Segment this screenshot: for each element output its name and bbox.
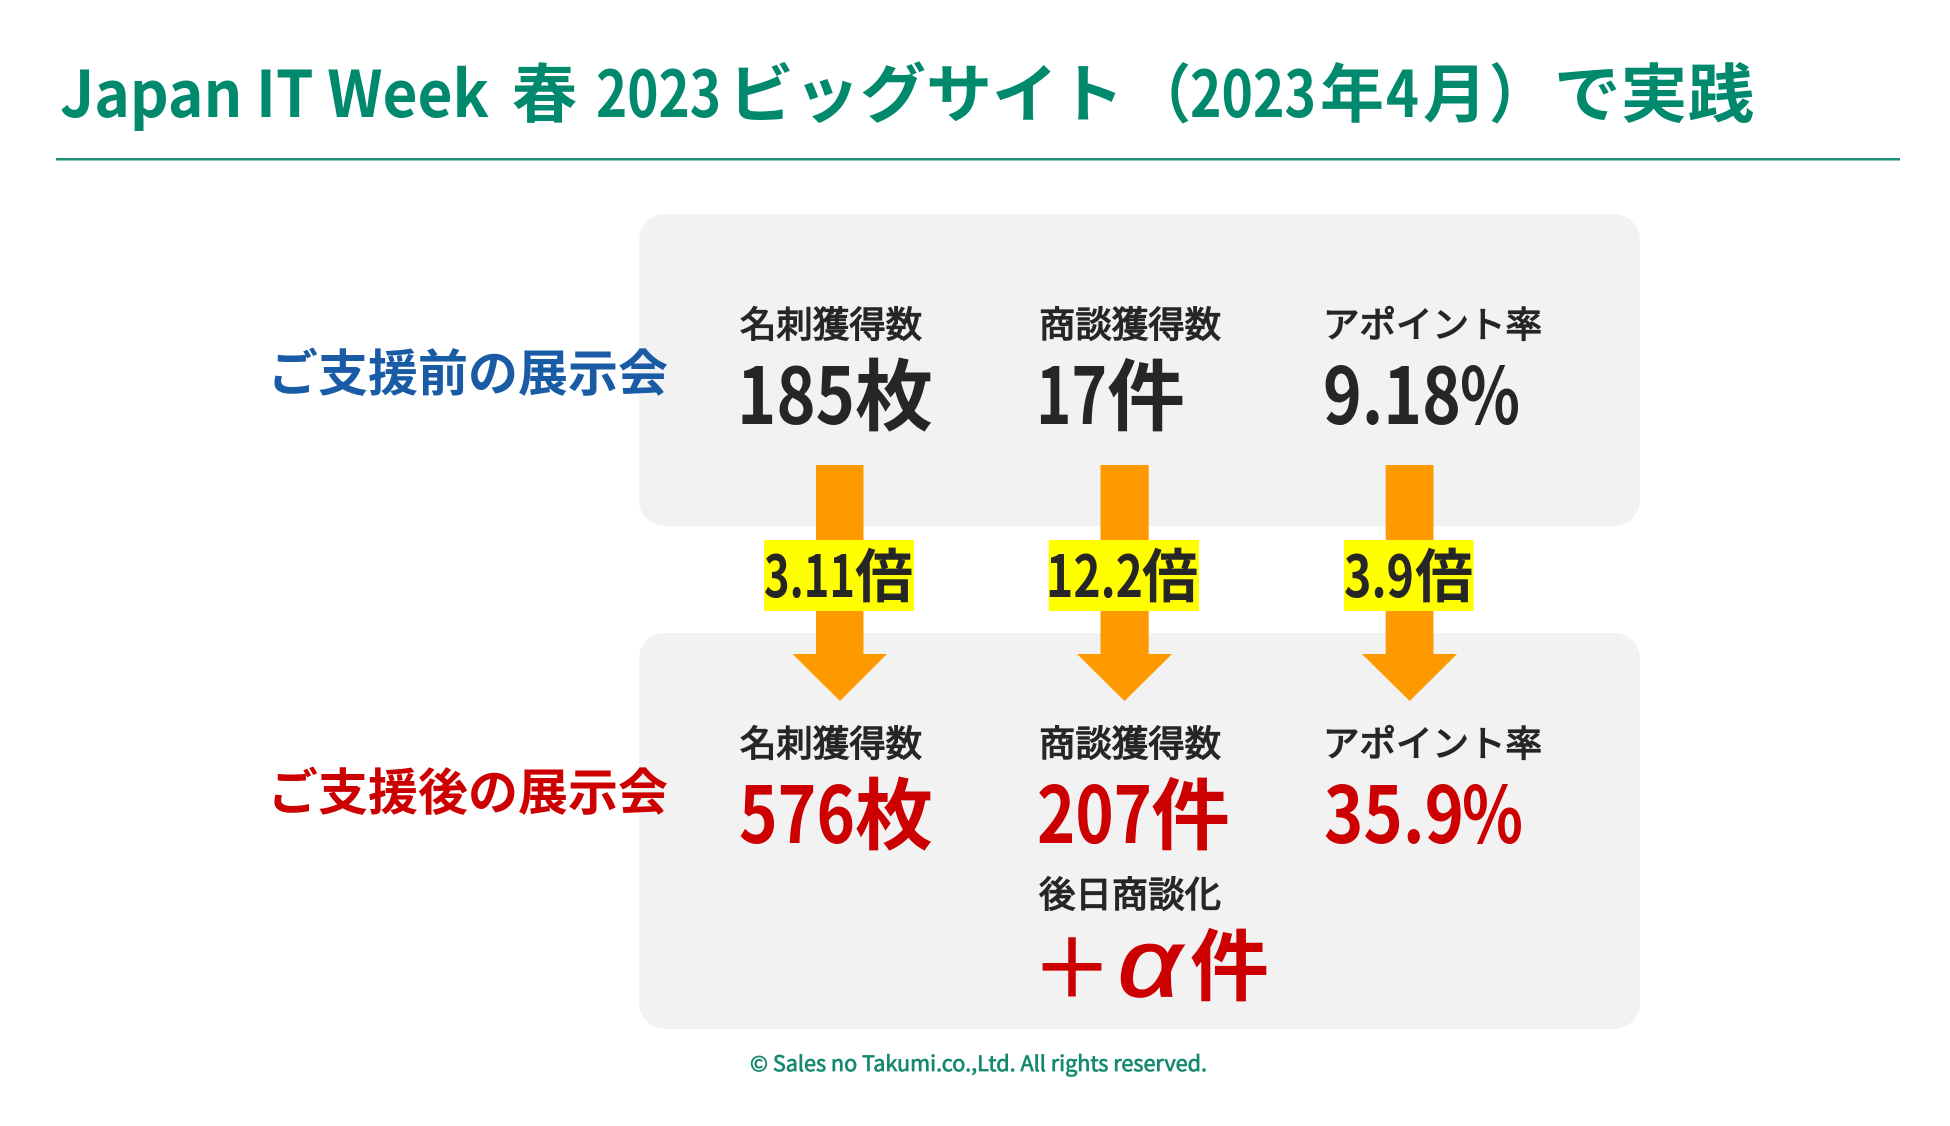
after: later meetings value: α (1118, 910, 1184, 1017)
before: business cards value: 185 (737, 335, 855, 447)
before: meetings label: 商談獲得数 (1039, 296, 1221, 348)
after: meetings value: 件 (1151, 754, 1230, 866)
title (60, 44, 1754, 136)
after: later meetings value: 件 (1190, 905, 1269, 1017)
title: ビッグサイト (728, 44, 1124, 136)
title: 2023 (596, 44, 721, 136)
arrow: business cards (792, 465, 887, 701)
before: appointment rate value: 9.18 (1323, 335, 1461, 447)
after: business cards label: 名刺獲得数 (740, 715, 922, 767)
multiplier badge: 12.2: 12.2 (1046, 530, 1143, 614)
after: business cards value: 枚 (855, 754, 933, 866)
arrow: appointment rate (1362, 465, 1457, 701)
arrow: meetings (1077, 465, 1172, 701)
after: appointment rate label: アポイント率 (1323, 715, 1542, 767)
after: later meetings value (1033, 905, 1269, 1019)
after: later meetings value: ＋ (1033, 907, 1111, 1019)
after: meetings label: 商談獲得数 (1039, 715, 1221, 767)
before: meetings value (1036, 335, 1185, 447)
before: meetings value: 17 (1036, 335, 1107, 447)
multiplier badge: 3.9 (1344, 530, 1474, 614)
multiplier badge: 3.11: 倍 (855, 530, 913, 614)
panel: after exhibition background (639, 633, 1640, 1029)
after: business cards value: 576 (739, 754, 855, 866)
after: later meetings label: 後日商談化 (1039, 866, 1221, 918)
before: business cards label: 名刺獲得数 (740, 296, 922, 348)
title: 年 (1320, 44, 1384, 136)
title: 春 (512, 44, 577, 136)
after: appointment rate value: % (1462, 754, 1523, 866)
multiplier badge: 3.9: 倍 (1415, 530, 1473, 614)
multiplier badge: 3.9: 3.9 (1344, 530, 1414, 614)
title: Japan IT Week (60, 44, 489, 136)
title: 4 (1386, 44, 1419, 136)
before: appointment rate label: アポイント率 (1323, 296, 1542, 348)
after: meetings value: 207 (1037, 754, 1152, 866)
title: 2023 (1190, 44, 1316, 136)
after: appointment rate value: 35.9 (1324, 754, 1464, 866)
title: （ (1133, 44, 1191, 136)
title: 月 (1423, 44, 1487, 136)
heading: before support: ご支援前の展示会 (268, 334, 668, 406)
title: ） (1489, 44, 1547, 136)
heading: after support: ご支援後の展示会 (268, 753, 668, 825)
before: business cards value: 枚 (855, 335, 933, 447)
title: で実践 (1554, 44, 1754, 136)
footer copyright: © Sales no Takumi.co.,Ltd. All rights reserved. (750, 1048, 1207, 1078)
before: meetings value: 件 (1107, 335, 1185, 447)
multiplier badge: 3.11: 3.11 (764, 530, 855, 614)
before: appointment rate value: % (1460, 335, 1520, 447)
multiplier badge: 12.2: 倍 (1142, 530, 1198, 614)
panel: before exhibition background (639, 214, 1640, 526)
